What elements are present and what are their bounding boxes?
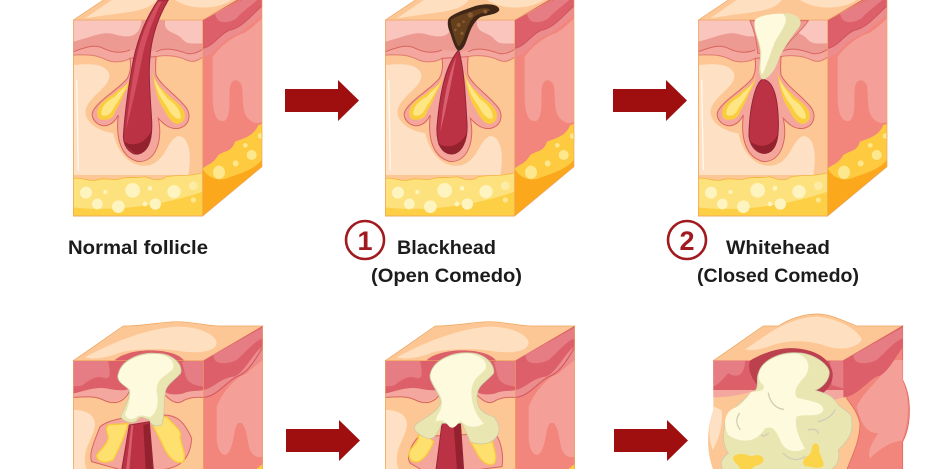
arrow: normal to blackhead [285,80,359,121]
pustule plug [415,353,499,444]
label: whitehead: (Closed Comedo) [697,265,859,287]
swollen skin top [713,314,903,361]
number badge 1: 1 [357,226,373,256]
hair shaft and bulb [123,0,168,154]
inflamed sheath with sebaceous glands [409,422,503,469]
label: blackhead [371,237,522,287]
panel: normal follicle [73,0,263,216]
arrow: pustule to cyst [614,420,688,461]
hair bulb [749,79,778,153]
number badge 1 [346,221,384,259]
panel: blackhead [385,0,575,216]
label: whitehead: Whitehead [726,237,830,259]
hair bulb [437,50,467,154]
number badge 2: 2 [679,226,695,256]
label: blackhead: (Open Comedo) [371,265,522,287]
arrow: blackhead to whitehead [613,80,687,121]
panel: cyst [708,314,909,469]
label: blackhead: Blackhead [397,237,496,259]
panel: papule [73,322,263,469]
label: whitehead [697,237,859,287]
right face [843,326,909,469]
inflamed sheath with sebaceous glands [91,415,192,469]
panel: whitehead [698,0,888,216]
number badge 2 [668,221,706,259]
panel: pustule [385,322,575,469]
pore funnel around whitehead [750,21,808,53]
arrow: papule to pustule [286,420,360,461]
comedo plug [118,353,181,426]
remaining gland fragments [733,443,824,469]
front face [708,348,860,469]
whitehead plug [754,13,801,79]
blackhead plug [448,4,499,51]
label: normal follicle: Normal follicle [68,237,208,259]
cyst mass [721,353,852,469]
